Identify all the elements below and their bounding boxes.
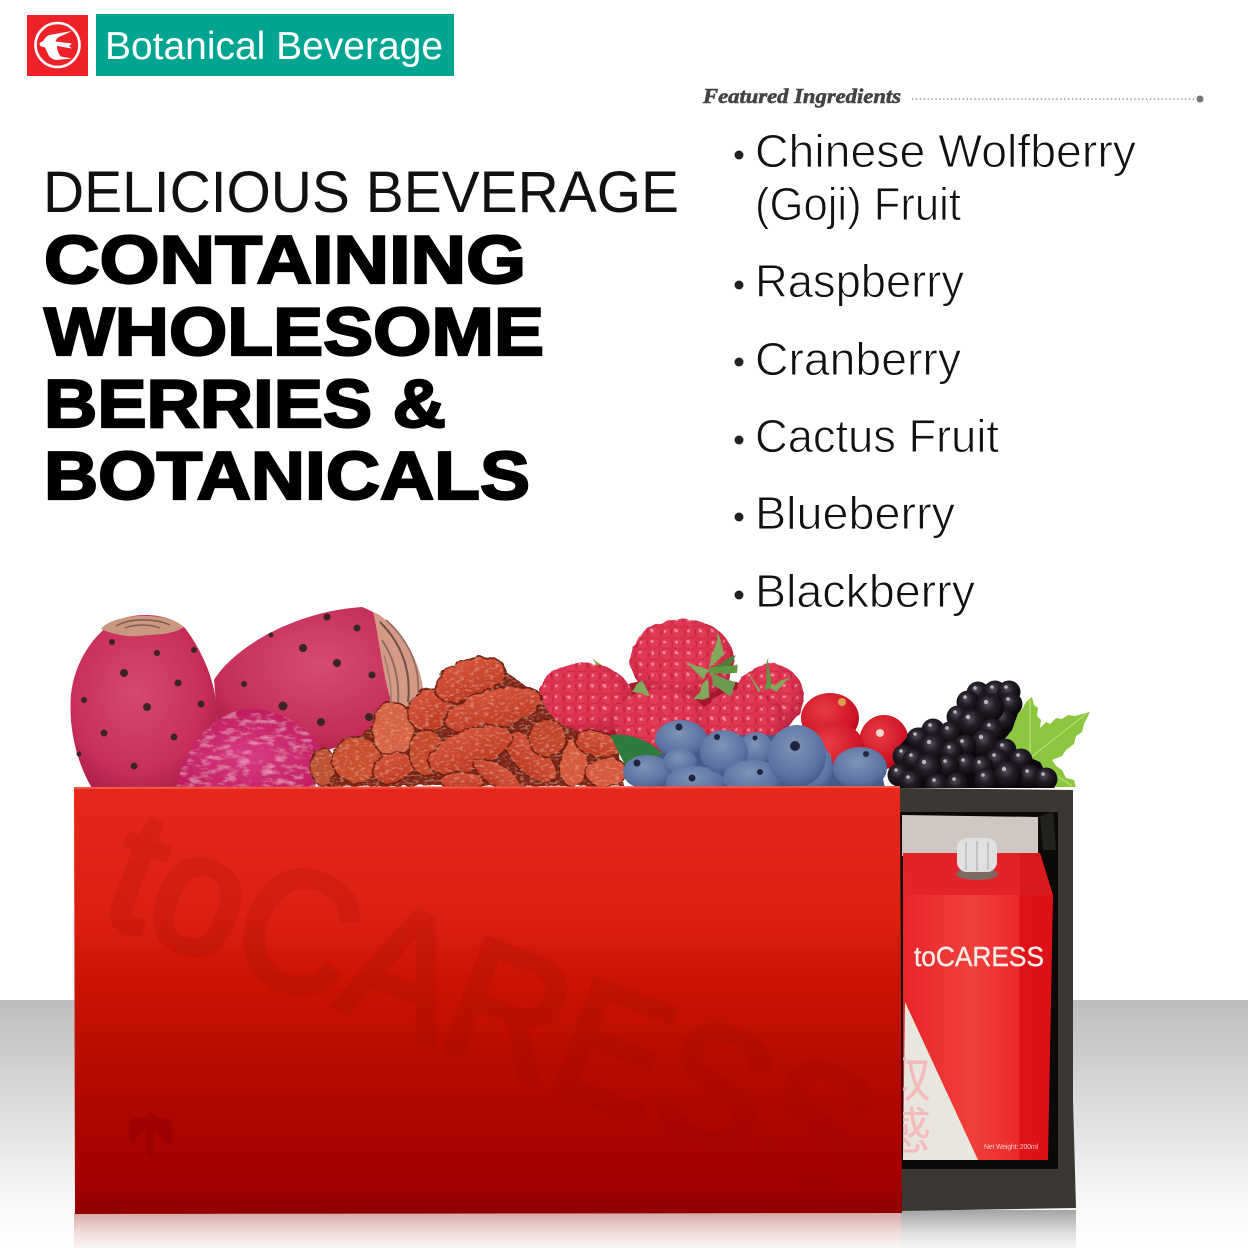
- vertical Chinese label: 感: [881, 1104, 931, 1160]
- category label: Botanical Beverage: [105, 25, 443, 68]
- ingredients list: Blueberry: [755, 487, 955, 539]
- ingredients list: Cranberry: [755, 333, 961, 385]
- vertical Chinese label: 取: [881, 1052, 931, 1108]
- cactus fruit: left whole fruit: [70, 615, 217, 788]
- main headline: BOTANICALS: [44, 438, 530, 514]
- embossed swallow emblem: [120, 1106, 180, 1166]
- floor background: [0, 1000, 1248, 1248]
- blackberries: [888, 680, 1058, 796]
- category label: [96, 14, 454, 76]
- black tray: [900, 788, 1076, 1211]
- featured ingredients heading: [702, 84, 1204, 108]
- watermark brand: toCARESS: [84, 775, 900, 1233]
- juice carton: [903, 838, 1053, 1160]
- main headline: [43, 160, 679, 514]
- cactus fruit: right whole fruit: [214, 607, 423, 752]
- net weight: Net Weight: 200ml: [984, 1144, 1038, 1151]
- cranberries: [801, 693, 908, 769]
- goji berries: [309, 655, 626, 787]
- logo icon: red square with swallow: [27, 15, 88, 76]
- ingredients list: Raspberry: [755, 255, 964, 307]
- blueberries: [610, 720, 887, 786]
- ingredients list: [734, 125, 1136, 617]
- fruit pile: [70, 607, 1090, 798]
- main headline: BERRIES &: [44, 366, 446, 442]
- carton top flap: [902, 815, 1038, 856]
- ingredients list: Chinese Wolfberry: [755, 125, 1136, 177]
- mint leaf: [1002, 697, 1090, 788]
- vertical Chinese label: [903, 1057, 930, 1152]
- category badge: [27, 14, 454, 76]
- featured ingredients heading: Featured Ingredients: [702, 84, 901, 108]
- box reflection on floor: [74, 1210, 1076, 1248]
- open tray with carton: [881, 788, 1076, 1211]
- main headline: CONTAINING: [44, 222, 526, 298]
- bottle cap: [956, 838, 998, 880]
- main headline: WHOLESOME: [44, 294, 544, 370]
- red sleeve box: [74, 775, 902, 1233]
- carton brand: toCARESS: [914, 941, 1044, 972]
- raspberries: [537, 619, 804, 755]
- white triangle panel: [903, 1002, 978, 1160]
- ingredients list: Cactus Fruit: [755, 410, 999, 462]
- ingredients list: (Goji) Fruit: [755, 178, 961, 230]
- ingredients list: Blackberry: [755, 565, 975, 617]
- cactus fruit: cut slice: [176, 709, 323, 788]
- main headline: DELICIOUS BEVERAGE: [43, 160, 679, 225]
